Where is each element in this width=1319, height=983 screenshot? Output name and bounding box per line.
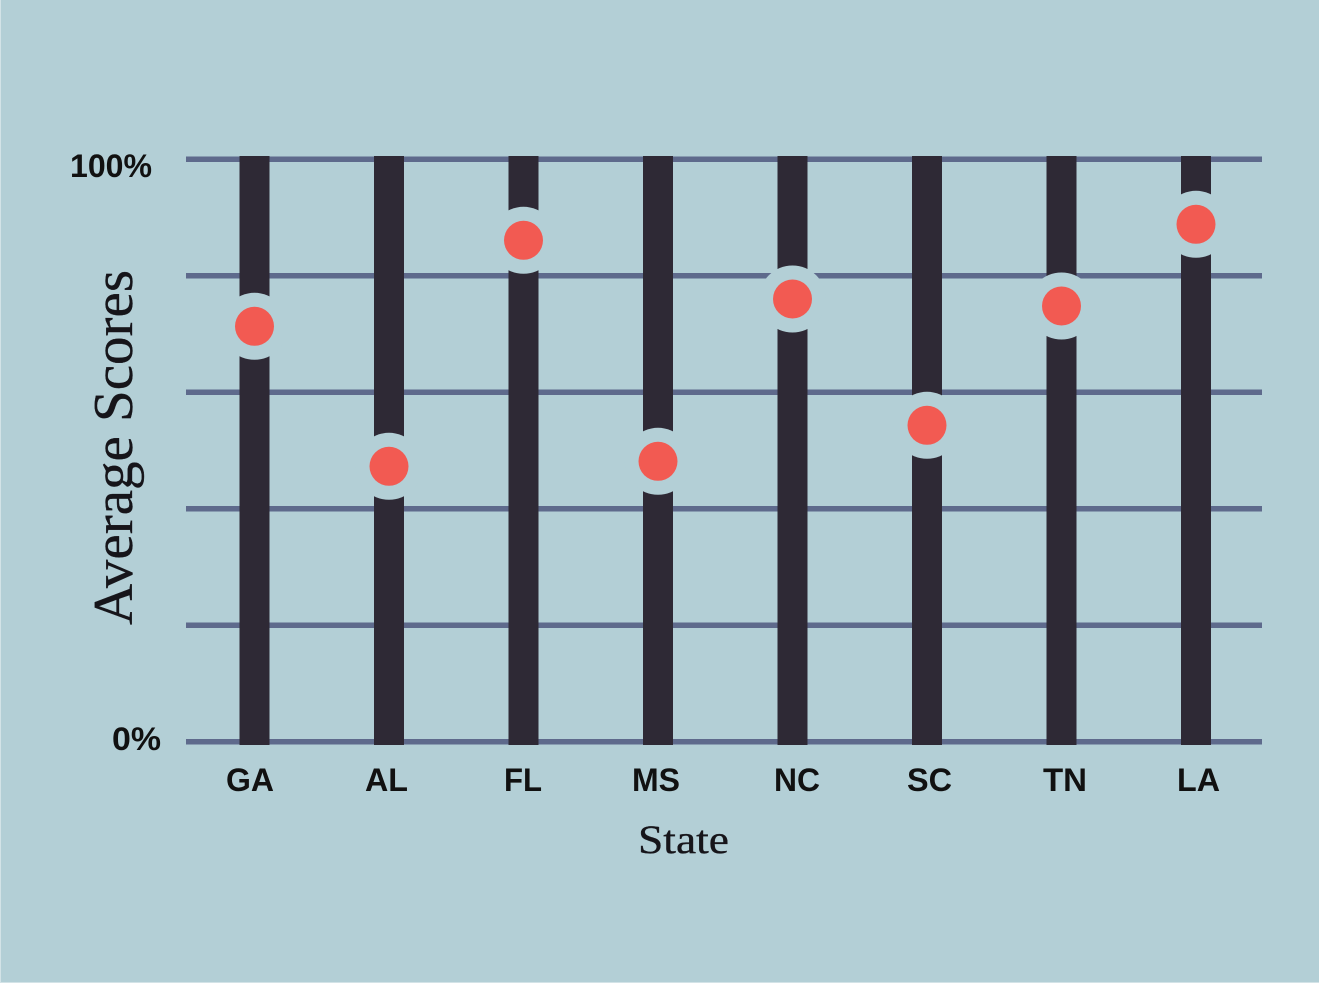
state labels: MS bbox=[632, 762, 680, 798]
data point: LA bbox=[1162, 191, 1230, 258]
y-axis tick labels bbox=[70, 148, 161, 757]
state labels: NC bbox=[774, 762, 820, 798]
data point: MS bbox=[624, 428, 692, 495]
data point: FL bbox=[490, 207, 557, 274]
data point: GA bbox=[221, 293, 288, 360]
state labels: GA bbox=[226, 762, 274, 798]
horizontal grid lines bbox=[186, 156, 1262, 744]
y-axis tick labels: 0% bbox=[112, 721, 161, 757]
y-axis tick labels: 100% bbox=[70, 148, 152, 184]
y-axis title: Average Scores bbox=[83, 270, 145, 625]
state bars bbox=[240, 156, 1211, 745]
state labels: TN bbox=[1043, 762, 1087, 798]
state labels: SC bbox=[907, 762, 952, 798]
x-axis title: State bbox=[638, 817, 729, 862]
data point: NC bbox=[759, 266, 826, 332]
data point: TN bbox=[1028, 272, 1095, 340]
state labels: FL bbox=[504, 762, 542, 798]
state labels: AL bbox=[365, 762, 408, 798]
data point: SC bbox=[894, 392, 960, 459]
state labels bbox=[226, 762, 1220, 798]
state labels: LA bbox=[1177, 762, 1220, 798]
data point: AL bbox=[356, 433, 422, 500]
